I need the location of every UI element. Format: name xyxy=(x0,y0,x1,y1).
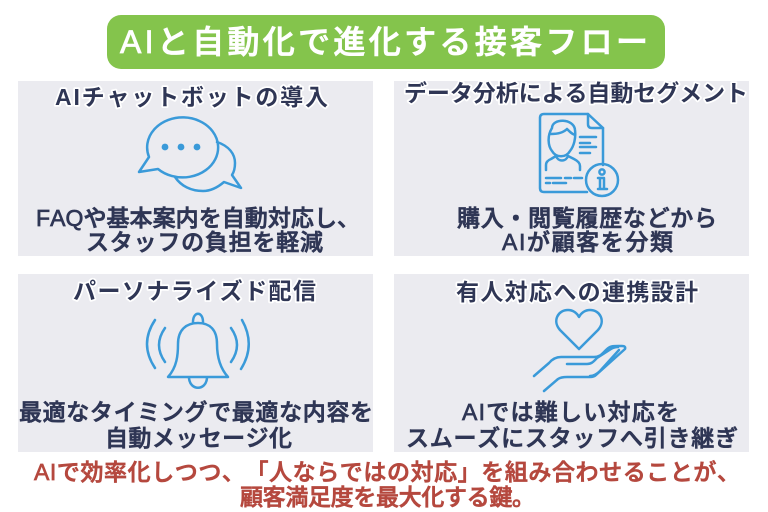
text: chatbot description xyxy=(36,205,360,255)
icon: ringing bell xyxy=(147,314,249,388)
heading: AI chatbot: AIチャットボットの導入 xyxy=(55,84,328,110)
text: delivery description xyxy=(19,399,373,451)
icon: chat bubbles xyxy=(139,117,241,191)
text: delivery description: 最適なタイミングで最適な内容を xyxy=(19,399,373,425)
title: AIと自動化で進化する接客フロー xyxy=(120,24,648,60)
panel: human handoff xyxy=(394,274,749,452)
footer message xyxy=(34,459,740,510)
heading: human handoff: 有人対応への連携設計 xyxy=(456,279,698,305)
panel: AI chatbot xyxy=(18,81,373,256)
text: handoff description xyxy=(406,399,738,451)
text: segmentation description xyxy=(457,205,717,255)
heading: personalized delivery: パーソナライズド配信 xyxy=(73,278,316,304)
text: chatbot description: FAQや基本案内を自動対応し、 xyxy=(36,205,360,231)
icon: profile document xyxy=(540,114,618,196)
panel: personalized delivery xyxy=(18,274,373,452)
panel: data segmentation xyxy=(394,80,749,256)
text: segmentation description: AIが顧客を分類 xyxy=(502,229,673,255)
text: segmentation description: 購入・閲覧履歴などから xyxy=(457,205,717,231)
text: chatbot description: スタッフの負担を軽減 xyxy=(86,229,323,255)
footer message: AIで効率化しつつ、「人ならではの対応」を組み合わせることが、 xyxy=(34,459,740,485)
heading: data segmentation: データ分析による自動セグメント xyxy=(404,80,748,106)
text: handoff description: AIでは難しい対応を xyxy=(462,399,679,425)
footer message: 顧客満足度を最大化する鍵。 xyxy=(240,484,535,510)
text: handoff description: スムーズにスタッフへ引き継ぎ xyxy=(406,425,738,451)
title xyxy=(107,15,665,69)
icon: heart in hand xyxy=(534,310,625,391)
text: delivery description: 自動メッセージ化 xyxy=(105,425,292,451)
